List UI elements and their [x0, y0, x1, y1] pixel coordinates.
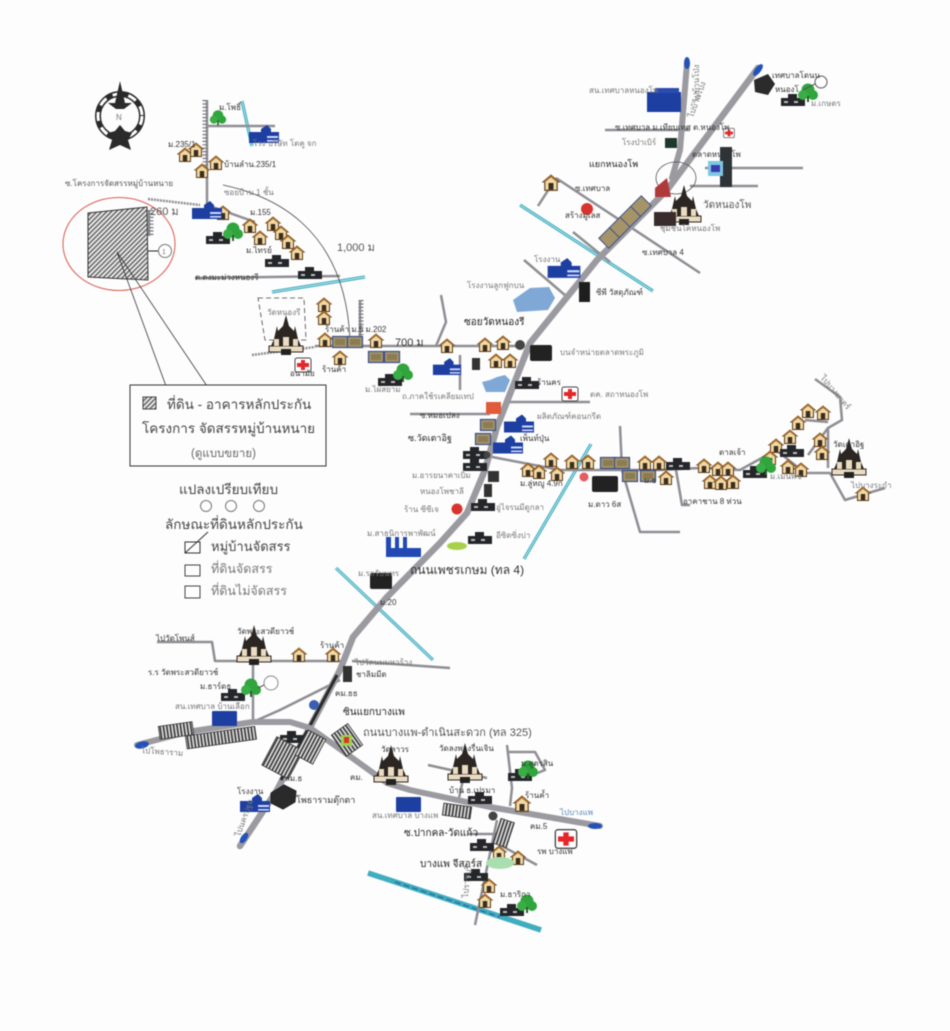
place labels: north-east cluster: เทศบาลโดนน — [772, 70, 821, 80]
place labels: south-east: วัดลาวร — [381, 745, 410, 754]
place labels: south-west: ร.ร วัดพระสวดียาวช์ — [148, 667, 219, 677]
place labels: centre: ถ.ภาคใช้รเคลียมเทป — [402, 392, 474, 401]
place labels: north-east cluster: หนองโ — [775, 84, 799, 94]
trees — [210, 84, 818, 913]
place labels: north-east cluster: ซ.เทศบาล — [575, 184, 610, 193]
place labels: centre: ตค. สถาหนองโพ — [590, 389, 648, 399]
place labels: south-west: ไปโพธาราม — [140, 745, 184, 758]
place labels: east: วัดเตาอิฐ — [833, 440, 864, 449]
place labels: south-east: บ้าน ธ.เปรมา — [449, 786, 495, 795]
place labels: north-east cluster: โรงงาน — [534, 254, 561, 264]
place labels: south-west: ร้านค้า — [320, 641, 344, 650]
place labels: north-east cluster: ชุมชนโคหนองโพ — [660, 223, 720, 233]
road end arrows — [134, 57, 765, 845]
place labels: south-east: ม.ธาริกา — [500, 890, 531, 899]
place labels: north-west cluster: ม.ไผ่สยาม — [365, 385, 401, 394]
place labels: east: อาคาชาน 8 ห่วน — [683, 497, 742, 506]
place labels: north-west cluster: ซอยบ้าน 1 ชั้น — [224, 186, 274, 197]
place labels: south-west: วัดพระสวดียาวช์ — [237, 626, 295, 636]
place labels: centre: ร้าน ซีซีเจ — [404, 505, 439, 514]
place labels: north-east cluster: ไปบ้านโป่ง — [685, 80, 708, 120]
place labels: centre: อู่ไจรนมีดูกลา — [496, 503, 544, 513]
place labels: centre: ซ.วัดเตาอิฐ — [408, 433, 452, 444]
distance curve and temple boundary — [223, 185, 350, 340]
place labels: south-east: รพ บางแพ — [537, 847, 573, 856]
place labels: north-east cluster: โรงป่าเบิร์ — [622, 137, 657, 147]
place labels: centre: ม.รถรับนทร — [358, 569, 400, 578]
main road: Phetkasem highway — [137, 63, 758, 846]
place labels: south-east: ร้านค้ำ — [525, 789, 549, 800]
place labels: south-west: ซินแยกบางแพ — [343, 707, 405, 718]
place labels: south-west: โพธารามตุ๊กตา — [296, 795, 355, 806]
place labels: south-east — [350, 742, 593, 899]
place labels: south-east: สน.เทศบาล บางแพ — [372, 811, 438, 820]
place labels: north-east cluster: สน.เทศบาลหนองโพ — [589, 85, 658, 95]
place labels: north-west cluster: โรง บริษัท โตคู จก — [253, 138, 317, 149]
place labels: north-west cluster: ซ.โครงการจัดสรรหมู่บ้านหนาย — [65, 178, 173, 189]
place labels: north-east cluster — [467, 64, 842, 297]
place labels: south-east: บางแพ จีสอร์ส — [420, 858, 482, 870]
light blue factories — [482, 287, 555, 392]
place labels: centre: ม.20 — [380, 598, 397, 607]
compass rose — [98, 81, 142, 150]
place labels: north-west cluster: ซอยวัดหนองรี — [464, 316, 525, 328]
place labels: south-west: สน.เทศบาล บ้านเลือก — [175, 702, 250, 711]
place labels: north-east cluster: ตลาดหนองโพ — [692, 149, 741, 159]
place labels: north-west cluster: ร้านค้า — [322, 365, 346, 374]
secondary roads — [148, 100, 885, 925]
place labels: south-west: โรงงาน — [237, 786, 264, 796]
legend box: project land: (ดูแบบขยาย) — [191, 448, 256, 460]
legend: comparison plots and land types: แปลงเปรียบเทียบ — [179, 482, 278, 497]
place labels: south-east: ม.สูตรสิน — [521, 759, 554, 769]
place labels: centre: ร้านคร — [537, 378, 562, 387]
place labels: north-west cluster: 700 ม — [395, 337, 424, 349]
hatched parcels near Bang Phae junction — [158, 722, 514, 847]
place labels: north-east cluster: ซ.เทศบาล 4 — [642, 248, 684, 257]
legend: comparison plots and land types: ที่ดินจัดสรร — [211, 560, 273, 576]
place labels: east — [644, 372, 892, 506]
place labels: north-west cluster: ม.235/1 — [168, 140, 196, 149]
place labels: east: ไปบางระกำ — [850, 481, 892, 490]
place labels: south-east: ไปราชบุรี — [461, 864, 473, 899]
place labels: north-west cluster: อนามัย — [290, 369, 315, 378]
place labels: south-west: ถนนบางแพ-ดำเนินสะดวก (ทล 325) — [363, 727, 532, 739]
legend box: project land: โครงการ จัดสรรหมู่บ้านหนาย — [142, 420, 315, 437]
point icons — [258, 76, 827, 848]
place labels: centre: เพ็นท์ปุ่น — [520, 433, 550, 443]
place labels: north-west cluster: บ้านลำน.235/1 — [224, 160, 277, 169]
place labels: north-west cluster: ม.โพธิ์ — [219, 101, 242, 112]
place labels: centre: ซ.หมอเปลง — [420, 411, 460, 420]
place labels: east: ไปบางมาตร์ — [818, 372, 853, 412]
project plot with red circle: 1 — [162, 249, 166, 256]
place labels: north-west cluster: วัดหนองรี — [267, 308, 301, 317]
place labels: north-west cluster: ต.ดงมะม่วงหนองรี — [195, 273, 259, 282]
legend: comparison plots and land types — [165, 482, 303, 598]
place labels: south-west: ม.ธาร์ดธ — [200, 681, 231, 691]
place labels: north-west cluster: ม.155 — [250, 208, 271, 217]
place labels: north-west cluster: 1,000 ม — [337, 242, 375, 254]
blue buildings — [192, 88, 681, 812]
place labels: centre: ถนนเพชรเกษม (ทล 4) — [410, 563, 524, 577]
place labels: south-west: ไปนครปฐม — [233, 798, 255, 839]
place labels: north-east cluster: วัดหนองโพ — [703, 198, 751, 211]
place labels: centre: ม.ลู่หญู 4.9ก — [520, 479, 563, 489]
waterways — [242, 101, 653, 930]
project plot with red circle — [63, 198, 207, 386]
place labels: east: ม.เมนพัช — [770, 472, 802, 481]
place labels: centre: บนจำหน่ายตลาดพระภูมิ — [560, 348, 644, 358]
place labels: south-east: คม.5 — [530, 822, 548, 831]
place labels: east: ม.ธ — [644, 476, 656, 485]
legend: comparison plots and land types: หมู่บ้านจัดสรร — [211, 539, 291, 555]
place labels: centre: ม.สาธนิการพาพัฒน์ — [367, 528, 436, 538]
legend box: project land — [130, 385, 326, 466]
place labels: centre: ผลิตภัณฑ์คอนกรีต — [537, 411, 601, 421]
place labels: south-east: ซ.ปากคล-วัดแก้ว — [404, 827, 478, 839]
place labels: north-east cluster: ซีพี วัสดุภัณฑ์ — [596, 287, 643, 297]
place labels: centre: อีซิดซิ่งบ่า — [496, 529, 530, 540]
place labels: south-west: คม.ธธ — [335, 689, 358, 698]
houses — [178, 142, 870, 908]
legend: comparison plots and land types: ลักษณะที่ดินหลักประกัน — [165, 515, 303, 532]
place labels: north-east cluster: ม.เกษตร — [811, 99, 842, 108]
place labels: south-east: วัดลงพวงรื่นเจิน — [439, 742, 494, 753]
place labels: north-east cluster: ซ.เทศบาล ม.เทียบเทศ ต.หนองโพ — [615, 122, 729, 132]
land parcels along roads — [332, 196, 656, 482]
place labels: centre: ม.อารยนาคาเบิ่ม — [412, 469, 471, 480]
place labels: south-west: ไปวัดนมมหาร้าง — [354, 658, 412, 667]
place labels: south-west: ไปวัดโพนส์ — [155, 633, 195, 643]
place labels: north-east cluster: แยกหนองโพ — [589, 159, 638, 169]
place labels: north-east cluster: สร้างมูเลส — [565, 211, 600, 221]
legend box: project land: ที่ดิน - อาคารหลักประกัน — [167, 395, 311, 412]
place labels: centre: หนองโพชาลี — [420, 486, 464, 496]
legend: comparison plots and land types: ที่ดินไม่จัดสรร — [211, 582, 287, 598]
place labels: east: ตาลเจ้า — [719, 448, 746, 457]
place labels: north-west cluster — [65, 101, 525, 394]
place labels: south-west: ลม.ธ — [285, 774, 302, 783]
place labels: south-east: ไปบางแพ — [559, 808, 593, 817]
place labels: south-west — [140, 626, 532, 839]
temples — [237, 185, 866, 785]
place labels: centre — [358, 348, 648, 607]
dark buildings — [206, 74, 805, 916]
place labels: north-west cluster: ร้านค้า ม.5 ม.202 — [325, 325, 387, 334]
place labels: north-west cluster: 260 ม — [150, 206, 179, 218]
compass rose: N — [116, 113, 122, 122]
place labels: south-west: ชาลิมมีด — [356, 670, 387, 679]
place labels: north-east cluster: โรงงานลูกฟูกบน — [467, 280, 525, 291]
place labels: north-east cluster: ไปบ้านโป่ง — [691, 64, 701, 103]
place labels: south-east: คม. — [350, 773, 363, 782]
place labels: north-west cluster: ม.ไทรย์ — [246, 245, 272, 255]
place labels: centre: ม.ดาว 6ส — [588, 500, 621, 509]
